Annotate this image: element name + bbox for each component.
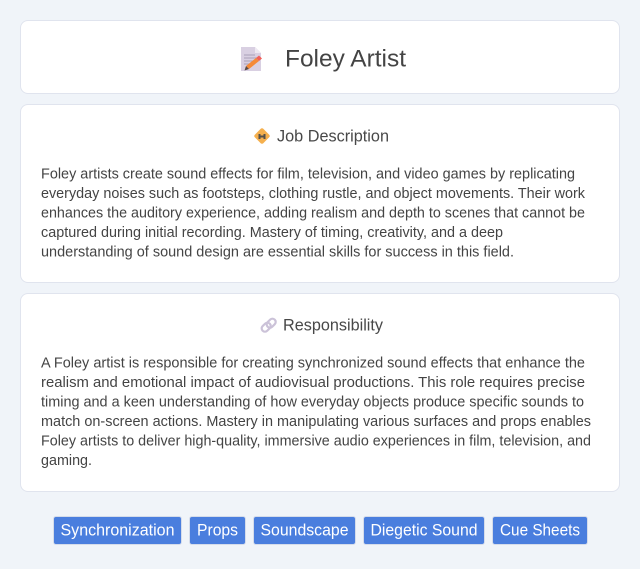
tag: Soundscape — [253, 516, 356, 545]
text block: job description: understanding of sound design are essential skills for success in this field. — [41, 244, 514, 260]
text block: job description: captured during initial recording. Mastery of timing, creativity, and a deep — [41, 225, 503, 241]
tag: Diegetic Sound: Diegetic Sound — [370, 522, 478, 540]
icon: document with pencil — [241, 47, 262, 71]
tag: Props — [189, 516, 246, 545]
text block: responsibility: Foley artists to deliver high-quality, immersive audio experiences in film, television, and — [41, 434, 591, 450]
tag: Synchronization — [53, 516, 182, 545]
icon: chain link — [260, 317, 277, 333]
text block: job description — [41, 166, 586, 260]
text block: job description: Foley artists create sound effects for film, television, and video games by replicating — [41, 166, 575, 182]
tag: Synchronization: Synchronization — [60, 522, 174, 540]
tag: Cue Sheets — [492, 516, 588, 545]
text block: responsibility: A Foley artist is responsible for creating synchronized sound effects that enhance the — [41, 356, 585, 372]
tag: Diegetic Sound — [363, 516, 485, 545]
title group — [241, 46, 406, 72]
heading: Job Description: Job Description — [277, 128, 389, 146]
tag: Soundscape: Soundscape — [260, 522, 348, 540]
text block: responsibility: match on-screen actions. Mastery in manipulating various surfaces and props enables — [41, 414, 591, 430]
panel: responsibility — [20, 293, 620, 492]
icon: diamond sign — [254, 128, 270, 144]
text block: job description: everyday noises such as footsteps, clothing rustle, and object movements. Their work — [41, 186, 586, 202]
heading: Foley Artist: Foley Artist — [285, 46, 406, 72]
responsibility content — [41, 316, 591, 469]
panel: title — [20, 20, 620, 94]
tag: Cue Sheets: Cue Sheets — [500, 522, 580, 540]
text block: job description: enhances the auditory experience, adding realism and depth to scenes that cannot be — [41, 206, 585, 222]
job description content — [41, 128, 586, 260]
text block: responsibility — [41, 356, 591, 469]
text block: responsibility: realism and emotional impact of audiovisual productions. This role requires precise — [41, 375, 585, 391]
text block: responsibility: gaming. — [41, 453, 92, 469]
text block: responsibility: timing and a keen understanding of how everyday objects produce specific sounds to — [41, 394, 584, 410]
panel: job description — [20, 104, 620, 283]
heading: Responsibility: Responsibility — [283, 316, 384, 334]
tag: Props: Props — [197, 522, 238, 540]
